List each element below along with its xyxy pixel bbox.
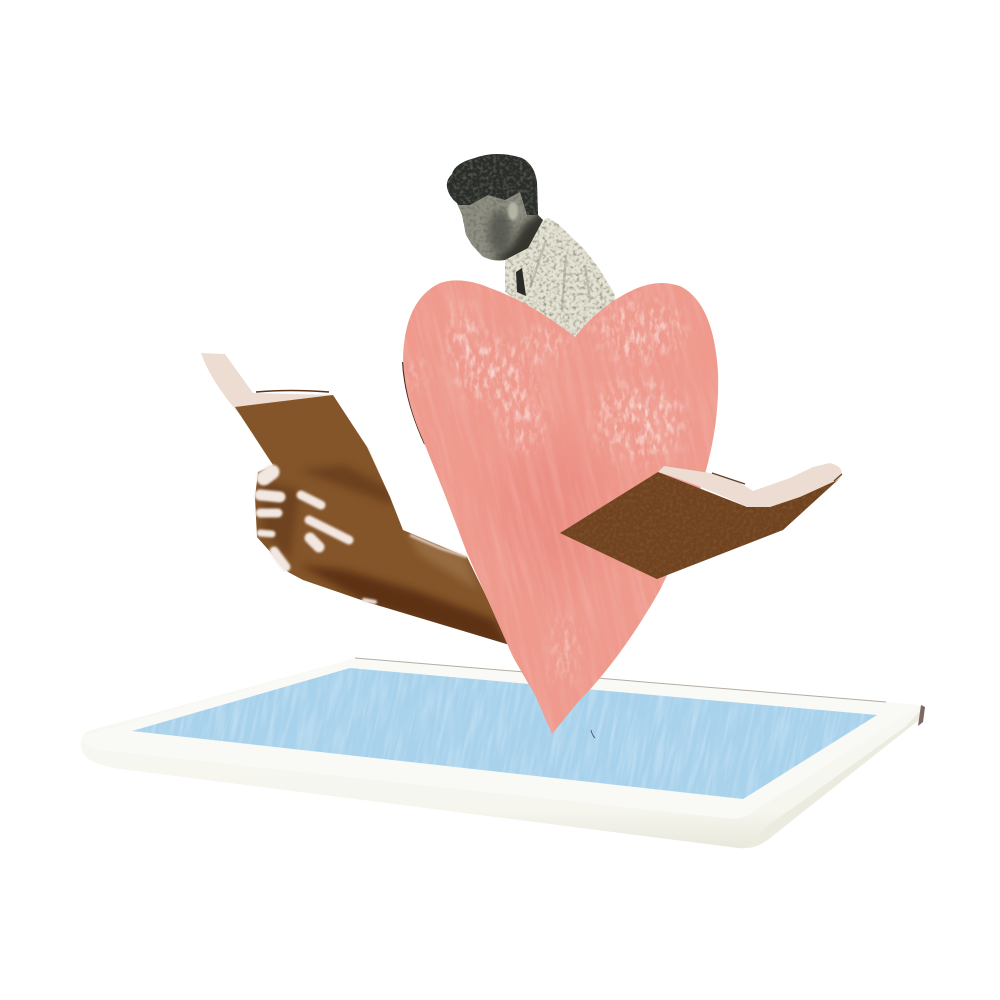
right book pages [658, 463, 842, 507]
tablet corner edge [918, 705, 925, 726]
right book page edges [712, 473, 842, 484]
face base [446, 154, 543, 260]
fingers shade [262, 480, 300, 560]
tablet [80, 658, 925, 848]
stray hair mark on screen [591, 730, 595, 738]
heart deeper tones [512, 460, 598, 560]
person [446, 154, 616, 337]
page edge line [256, 390, 329, 392]
arm and book cover [235, 395, 508, 644]
heart [402, 280, 718, 734]
tablet top edge shadow [355, 658, 886, 702]
dark band on arm [300, 565, 512, 650]
tablet right side shade [745, 707, 924, 848]
book pages [201, 353, 390, 500]
arm top highlight [410, 535, 467, 557]
ear [508, 202, 518, 220]
right book [560, 463, 842, 579]
right book cover [560, 472, 840, 579]
dark band on book [300, 465, 392, 505]
fingers [260, 472, 375, 602]
collage illustration [80, 154, 925, 848]
tablet top bezel [83, 658, 920, 819]
tie [516, 268, 526, 296]
shirt folds [530, 240, 590, 310]
tablet screen [132, 668, 877, 799]
arm highlight [409, 537, 476, 586]
heart chalky blotches [405, 300, 685, 686]
left arm holding book [201, 353, 520, 660]
head and hair [446, 154, 543, 260]
hair [446, 154, 538, 215]
neck shadow [490, 215, 543, 260]
heart vertical streaks [404, 281, 718, 734]
cheek shadow [488, 210, 512, 254]
heart base [395, 270, 730, 740]
shirt [505, 218, 618, 345]
tablet body [81, 658, 924, 848]
heart left dark edge [403, 362, 425, 444]
